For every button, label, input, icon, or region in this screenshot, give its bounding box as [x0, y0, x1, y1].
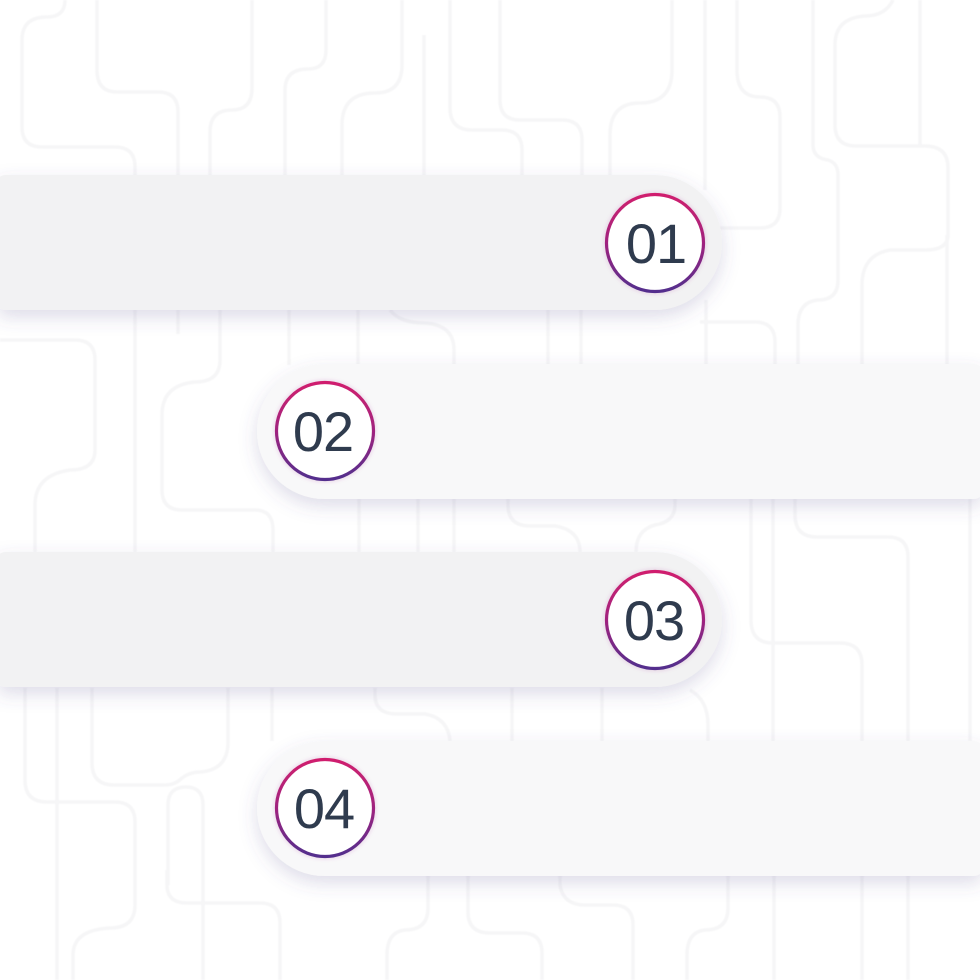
panel: option 04 — [257, 741, 980, 876]
panel: option 01 — [0, 175, 722, 310]
number badge 02: 02 — [293, 400, 353, 463]
number badge 03 — [606, 572, 704, 668]
panel: option 02 — [257, 364, 980, 499]
panel bar 03 — [0, 552, 722, 687]
number badge 04: 04 — [294, 777, 354, 840]
number badge 04 — [276, 760, 374, 856]
number badge 01: 01 — [626, 212, 686, 275]
panel: option 03 — [0, 552, 722, 687]
panel bar 04 — [257, 741, 980, 876]
panel bar 02 — [257, 364, 980, 499]
number badge 01 — [606, 194, 704, 292]
panel bar 01 — [0, 175, 722, 310]
number badge 02 — [276, 382, 374, 480]
number badge 03: 03 — [624, 589, 684, 652]
